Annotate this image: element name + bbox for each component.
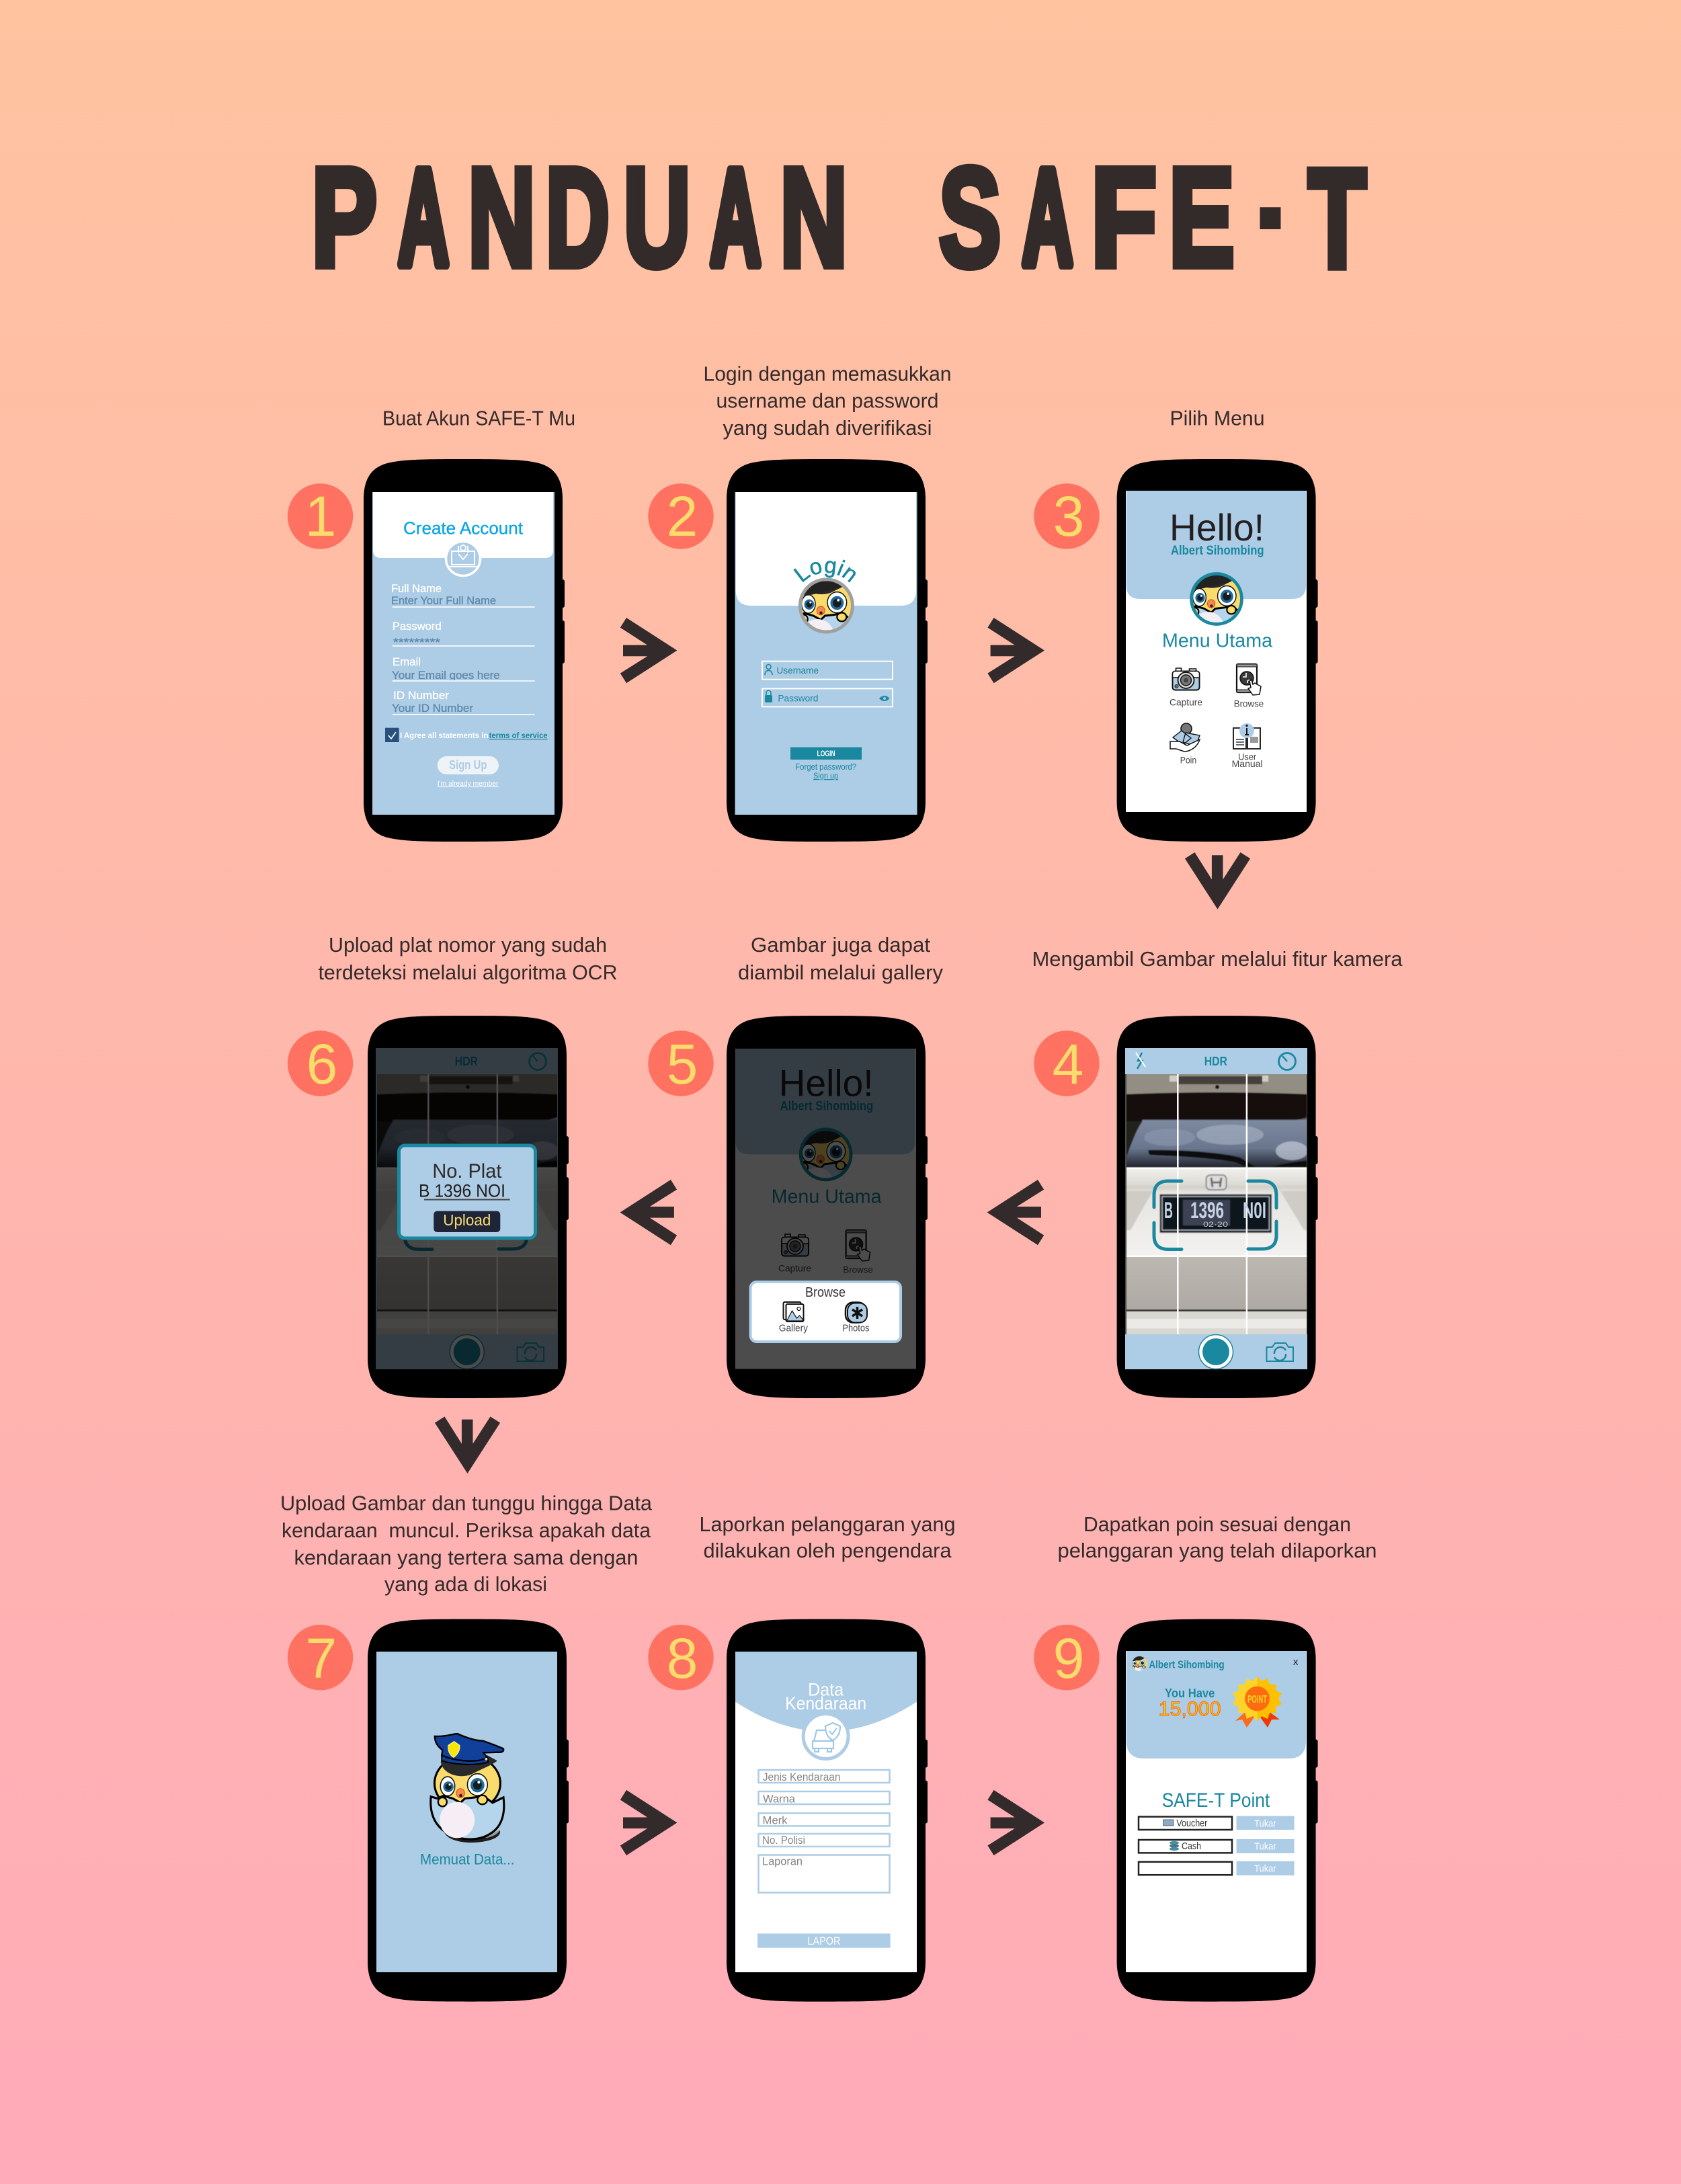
caption step 6: terdeteksi melalui algoritma OCR [319,961,617,984]
phone 9: points [1117,1619,1318,2002]
title: N [780,140,848,296]
mascot avatar [792,559,862,658]
arrow 7 to 8 [620,1790,677,1855]
reward row: empty: Tukar [1254,1863,1276,1874]
phone 6: plate detected [368,1016,569,1398]
dim hdr label: HDR [455,1055,478,1068]
caption step 7: yang ada di lokasi [384,1573,547,1596]
button: login [790,747,862,760]
caption step 5: diambil melalui gallery [738,961,944,984]
phone 3: main menu [1117,459,1318,842]
header card [373,492,553,558]
step badge 5: 5 [667,1033,698,1096]
caption step 9: Dapatkan poin sesuai dengan [1083,1513,1351,1536]
licence plate text [1164,1198,1266,1229]
dim camera flip [518,1343,544,1361]
caption step 2: yang sudah diverifikasi [723,417,932,440]
step badge 6 [288,1030,353,1096]
header card [1126,1651,1306,1758]
icon: point medal: POINT [1247,1694,1267,1705]
input: no polisi: No. Polisi [762,1834,805,1847]
small avatar [1130,1651,1149,1678]
form field: full name: Enter Your Full Name [391,594,496,607]
heading: menu utama: Menu Utama [1162,631,1273,652]
form field: id number [392,689,535,715]
input: username [762,661,893,680]
arrow 4 to 5 [987,1180,1044,1245]
step badge 6: 6 [306,1033,337,1096]
step badge 7: 7 [306,1627,337,1690]
caption step 4: Mengambil Gambar melalui fitur kamera [1032,948,1403,971]
label: user manual [1232,752,1263,769]
browse popup: Photos [842,1323,869,1334]
icon: gallery [784,1302,804,1322]
step badge 9 [1034,1625,1100,1690]
reward row: voucher: Voucher [1176,1818,1207,1829]
form field: password [393,620,535,649]
input: warna: Warna [763,1792,796,1805]
heading: data kendaraan [785,1679,866,1713]
title: E [1169,140,1235,296]
label: browse: Browse [843,1264,873,1275]
icon: laptop signup [446,542,480,575]
you have label: You Have [1165,1687,1215,1700]
reward row: empty [1139,1861,1295,1875]
browse popup [751,1282,901,1342]
title: D [546,138,610,295]
label: browse: Browse [1234,698,1264,709]
input: no polisi [758,1834,890,1847]
browse popup: Browse [805,1285,846,1300]
header card [736,492,916,606]
points value: 15,000 [1159,1698,1221,1720]
caption step 7: kendaraan muncul. Periksa apakah data [282,1519,651,1542]
caption step 1: Buat Akun SAFE-T Mu [382,407,575,430]
step badge 3 [1034,483,1100,549]
step badge 1: 1 [305,485,336,548]
title: · [1249,134,1299,299]
label: capture: Capture [778,1262,811,1273]
greeting: Hello! [1170,506,1264,549]
heading: data kendaraan: Kendaraan [785,1693,866,1713]
plate popup [399,1145,535,1238]
title: A [398,142,449,294]
caption step 6 [319,934,617,984]
form field: id number: Your ID Number [392,702,473,715]
plate popup: B 1396 NOI [419,1181,505,1201]
input: jenis kendaraan [758,1770,890,1783]
checkbox terms: terms of service [489,731,548,740]
form field: email [392,655,535,682]
step badge 2 [648,483,714,549]
icon: capture camera [782,1234,809,1256]
curved header [735,1652,917,1732]
button: lapor [757,1933,891,1948]
icon: user manual book [1233,723,1260,749]
heading: menu utama: Menu Utama [772,1186,882,1207]
user name: Albert Sihombing [1149,1660,1225,1671]
phone 4: camera capture [1117,1016,1318,1398]
icon: point medal [1233,1676,1282,1728]
button: lapor: LAPOR [807,1935,840,1947]
mascot avatar [793,1110,860,1205]
caption step 9: pelanggaran yang telah dilaporkan [1058,1539,1377,1562]
form field: password: ********* [393,636,440,649]
reward row: cash: Tukar [1254,1841,1276,1853]
button: upload: Upload [443,1211,491,1229]
dim shutter [450,1335,484,1369]
step badge 5 [648,1030,714,1096]
caption step 5: Gambar juga dapat [751,934,931,957]
input: warna [758,1791,890,1805]
title: A [1022,142,1073,294]
title: A [710,142,761,294]
link: sign up: Sign up [813,771,838,780]
button: login: LOGIN [817,749,835,758]
link: forget password: Forget password? [795,762,856,772]
user name: Albert Sihombing [1171,544,1264,558]
form field: full name: Full Name [391,582,442,595]
icon: browse [1237,664,1261,695]
focus brackets [1154,1181,1276,1249]
title: S [939,140,1001,296]
close x: x [1293,1656,1299,1668]
icon: poin money hand [1170,723,1200,752]
title: U [624,140,690,296]
heading: create account: Create Account [403,518,524,538]
caption step 8: Laporkan pelanggaran yang [699,1513,956,1536]
caption step 2: username dan password [716,390,938,413]
step badge 3: 3 [1053,485,1084,548]
car rear photo [373,1073,561,1336]
grid lines [1126,1074,1307,1334]
button: upload [434,1211,500,1232]
step badge 4: 4 [1053,1033,1083,1096]
dim overlay [376,1048,558,1369]
phone 5: browse popup [727,1016,928,1398]
caption step 7 [280,1492,652,1596]
input: merk: Merk [762,1814,788,1826]
arc heading: login: Login [793,559,856,583]
arc heading: login [793,559,856,583]
bottom camera bar [1125,1334,1307,1369]
button: sign up: Sign Up [449,758,487,772]
form field: id number: ID Number [393,689,449,702]
header card [1126,491,1306,599]
link: already member: I'm already member [438,780,499,788]
arrow 2 to 3 [987,618,1044,683]
input: username: Username [777,665,819,676]
checkbox terms: I Agree all statements in [400,731,488,740]
step badge 2: 2 [667,485,698,548]
reward row: cash: Cash [1182,1841,1201,1852]
step badge 8 [648,1625,714,1690]
input: laporan: Laporan [762,1855,803,1867]
caption step 2 [703,363,952,440]
phone 8: vehicle data [727,1619,928,2002]
checkbox terms [385,728,548,742]
input: laporan [758,1855,890,1893]
form field: email: Email [393,655,421,668]
arrow 1 to 2 [620,618,677,683]
caption step 5 [738,934,944,984]
label: capture: Capture [1170,696,1202,707]
icon: browse [846,1230,870,1261]
button: sign up [438,756,499,774]
greeting: Hello! [779,1061,874,1104]
arrow 3 to 4 [1185,852,1250,909]
browse popup: Gallery [779,1323,808,1334]
title: F [1091,140,1157,296]
dim timer icon [530,1053,546,1070]
step badge 9: 9 [1053,1627,1084,1690]
dim overlay [735,1049,916,1369]
label: poin: Poin [1180,755,1196,766]
icon: capture camera [1172,668,1199,690]
heading: safe-t point: SAFE-T Point [1162,1789,1270,1812]
mascot avatar [1184,554,1252,649]
caption step 3: Pilih Menu [1170,407,1265,430]
reward row: cash [1139,1839,1295,1853]
heading: data kendaraan: Data [808,1679,844,1699]
caption step 2: Login dengan memasukkan [703,363,952,386]
step badge 1 [288,483,353,549]
arrow 8 to 9 [987,1790,1044,1855]
arrow 6 to 7 [435,1416,500,1473]
title [312,134,1366,299]
phone 2: login [727,459,928,842]
step badge 8: 8 [667,1627,698,1690]
caption step 7: Upload Gambar dan tunggu hingga Data [280,1492,652,1515]
label: user manual: User [1238,752,1256,762]
reward row: voucher [1139,1816,1295,1830]
licence plate text: B [1164,1198,1173,1223]
user name: Albert Sihombing [780,1099,873,1113]
licence plate text: 02·20 [1203,1221,1228,1229]
caption step 7: kendaraan yang tertera sama dengan [294,1546,639,1569]
arrow 5 to 6 [620,1180,677,1245]
car rear photo [1122,1073,1311,1336]
form field: password: Password [393,620,442,633]
input: password [762,688,893,706]
caption step 6: Upload plat nomor yang sudah [329,934,607,957]
input: jenis kendaraan: Jenis Kendaraan [763,1771,840,1783]
input: merk [758,1813,890,1826]
top camera bar: HDR [1204,1055,1227,1068]
header card [735,1049,915,1154]
title: N [468,140,536,296]
caption step 8: dilakukan oleh pengendara [703,1539,952,1562]
licence plate text: N0I [1243,1198,1266,1223]
licence plate text: 1396 [1190,1198,1224,1223]
label: user manual: Manual [1232,758,1263,769]
caption step 8 [699,1513,956,1562]
step badge 4 [1034,1030,1100,1096]
title: P [312,139,377,296]
input: password: Password [778,692,818,703]
loading text: Memuat Data... [420,1851,515,1867]
icon: photos [846,1303,867,1323]
step badge 7 [288,1625,353,1690]
form field: full name [391,582,535,608]
title: T [1309,140,1366,296]
phone 1: create account [364,459,565,842]
mascot police chick [431,1734,504,1843]
phone 7: loading [368,1619,569,2002]
reward row: voucher: Tukar [1254,1818,1276,1829]
top camera bar [1125,1048,1307,1074]
form field: email: Your Email goes here [392,669,500,682]
plate popup: No. Plat [432,1160,502,1182]
icon: car shield [803,1714,848,1758]
caption step 9 [1058,1513,1377,1562]
